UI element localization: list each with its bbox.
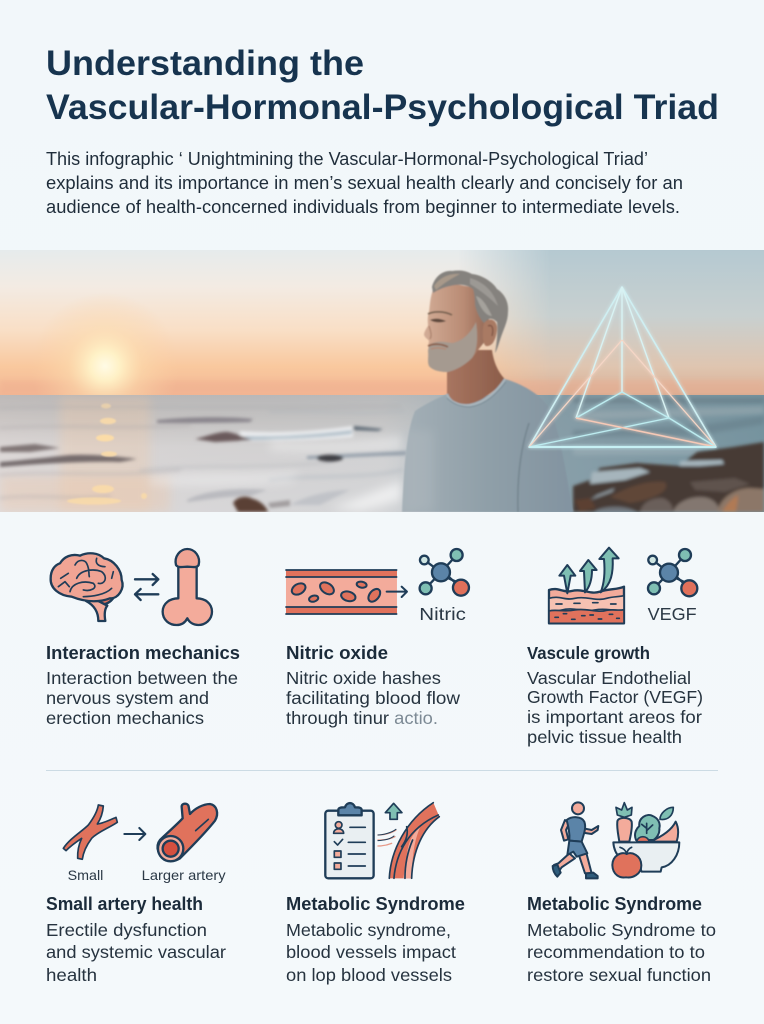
description: restore sexual function: [527, 965, 711, 985]
sky: [0, 250, 764, 396]
man: [402, 270, 573, 512]
description: facilitating blood flow: [286, 688, 460, 708]
description: erection mechanics: [46, 708, 204, 728]
intro text: [46, 149, 683, 217]
panel: lifestyle recommendation: [527, 802, 716, 985]
icon: tissue layers with growth arrows and molecule: [549, 548, 697, 624]
intro text: explains and its importance in men’s sexual health clearly and concisely for an: [46, 173, 683, 193]
description: Interaction between the: [46, 668, 238, 688]
panel: interaction mechanics: [46, 549, 240, 728]
description: [46, 668, 238, 728]
description: pelvic tissue health: [527, 727, 682, 747]
description: is important areos for: [527, 707, 702, 727]
icon: blood vessel and molecule: Nitric: [419, 604, 466, 624]
panel: nitric oxide: [286, 549, 469, 728]
icon: clipboard checklist and blood vessel: [325, 803, 439, 878]
title: Vascular-Hormonal-Psychological Triad: [46, 88, 719, 127]
description: Vascular Endothelial: [527, 668, 691, 688]
rocks: [573, 442, 764, 512]
description: blood vessels impact: [286, 942, 456, 962]
icon: tissue layers with growth arrows and molecule: VEGF: [648, 604, 697, 624]
sun: [52, 303, 158, 395]
title: [46, 44, 719, 127]
description: Erectile dysfunction: [46, 920, 207, 940]
title: Understanding the: [46, 44, 364, 83]
icon: brain and organ with arrows: [51, 549, 212, 625]
panel: vascule growth: [527, 548, 703, 747]
description: health: [46, 965, 97, 985]
description: nervous system and: [46, 688, 209, 708]
sea: [0, 395, 764, 512]
icon: blood vessel and molecule: [286, 549, 469, 624]
hero photo: man at seaside at sunset: [0, 250, 764, 512]
description: Growth Factor (VEGF): [527, 687, 703, 707]
description: through tinur actio.: [286, 708, 438, 728]
heading: Metabolic Syndrome: [527, 894, 702, 914]
description: [527, 668, 703, 747]
triad pyramid line graphic: [529, 287, 716, 447]
heading: Vascule growth: [527, 643, 650, 663]
panel: metabolic syndrome: [286, 803, 465, 985]
intro text: audience of health-concerned individuals from beginner to intermediate levels.: [46, 197, 680, 217]
heading: Nitric oxide: [286, 643, 388, 663]
description: Metabolic Syndrome to: [527, 920, 716, 940]
icon: runner and healthy food bowl: [553, 802, 679, 878]
description: Metabolic syndrome,: [286, 920, 451, 940]
description: recommendation to to: [527, 942, 705, 962]
description: [286, 920, 456, 985]
heading: Metabolic Syndrome: [286, 894, 465, 914]
heading: Small artery health: [46, 894, 203, 914]
description: on lop blood vessels: [286, 965, 452, 985]
description: and systemic vascular: [46, 942, 226, 962]
description: [286, 668, 460, 728]
icon: small artery to larger artery: Small: [68, 867, 103, 883]
heading: Interaction mechanics: [46, 643, 240, 663]
icon: small artery to larger artery: Larger artery: [142, 867, 226, 883]
description: [527, 920, 716, 985]
intro text: This infographic ‘ Unightmining the Vascular-Hormonal-Psychological Triad’: [46, 149, 648, 169]
icon: small artery to larger artery: [63, 804, 226, 883]
description: Nitric oxide hashes: [286, 668, 441, 688]
description: [46, 920, 226, 985]
panel: small artery health: [46, 804, 226, 985]
